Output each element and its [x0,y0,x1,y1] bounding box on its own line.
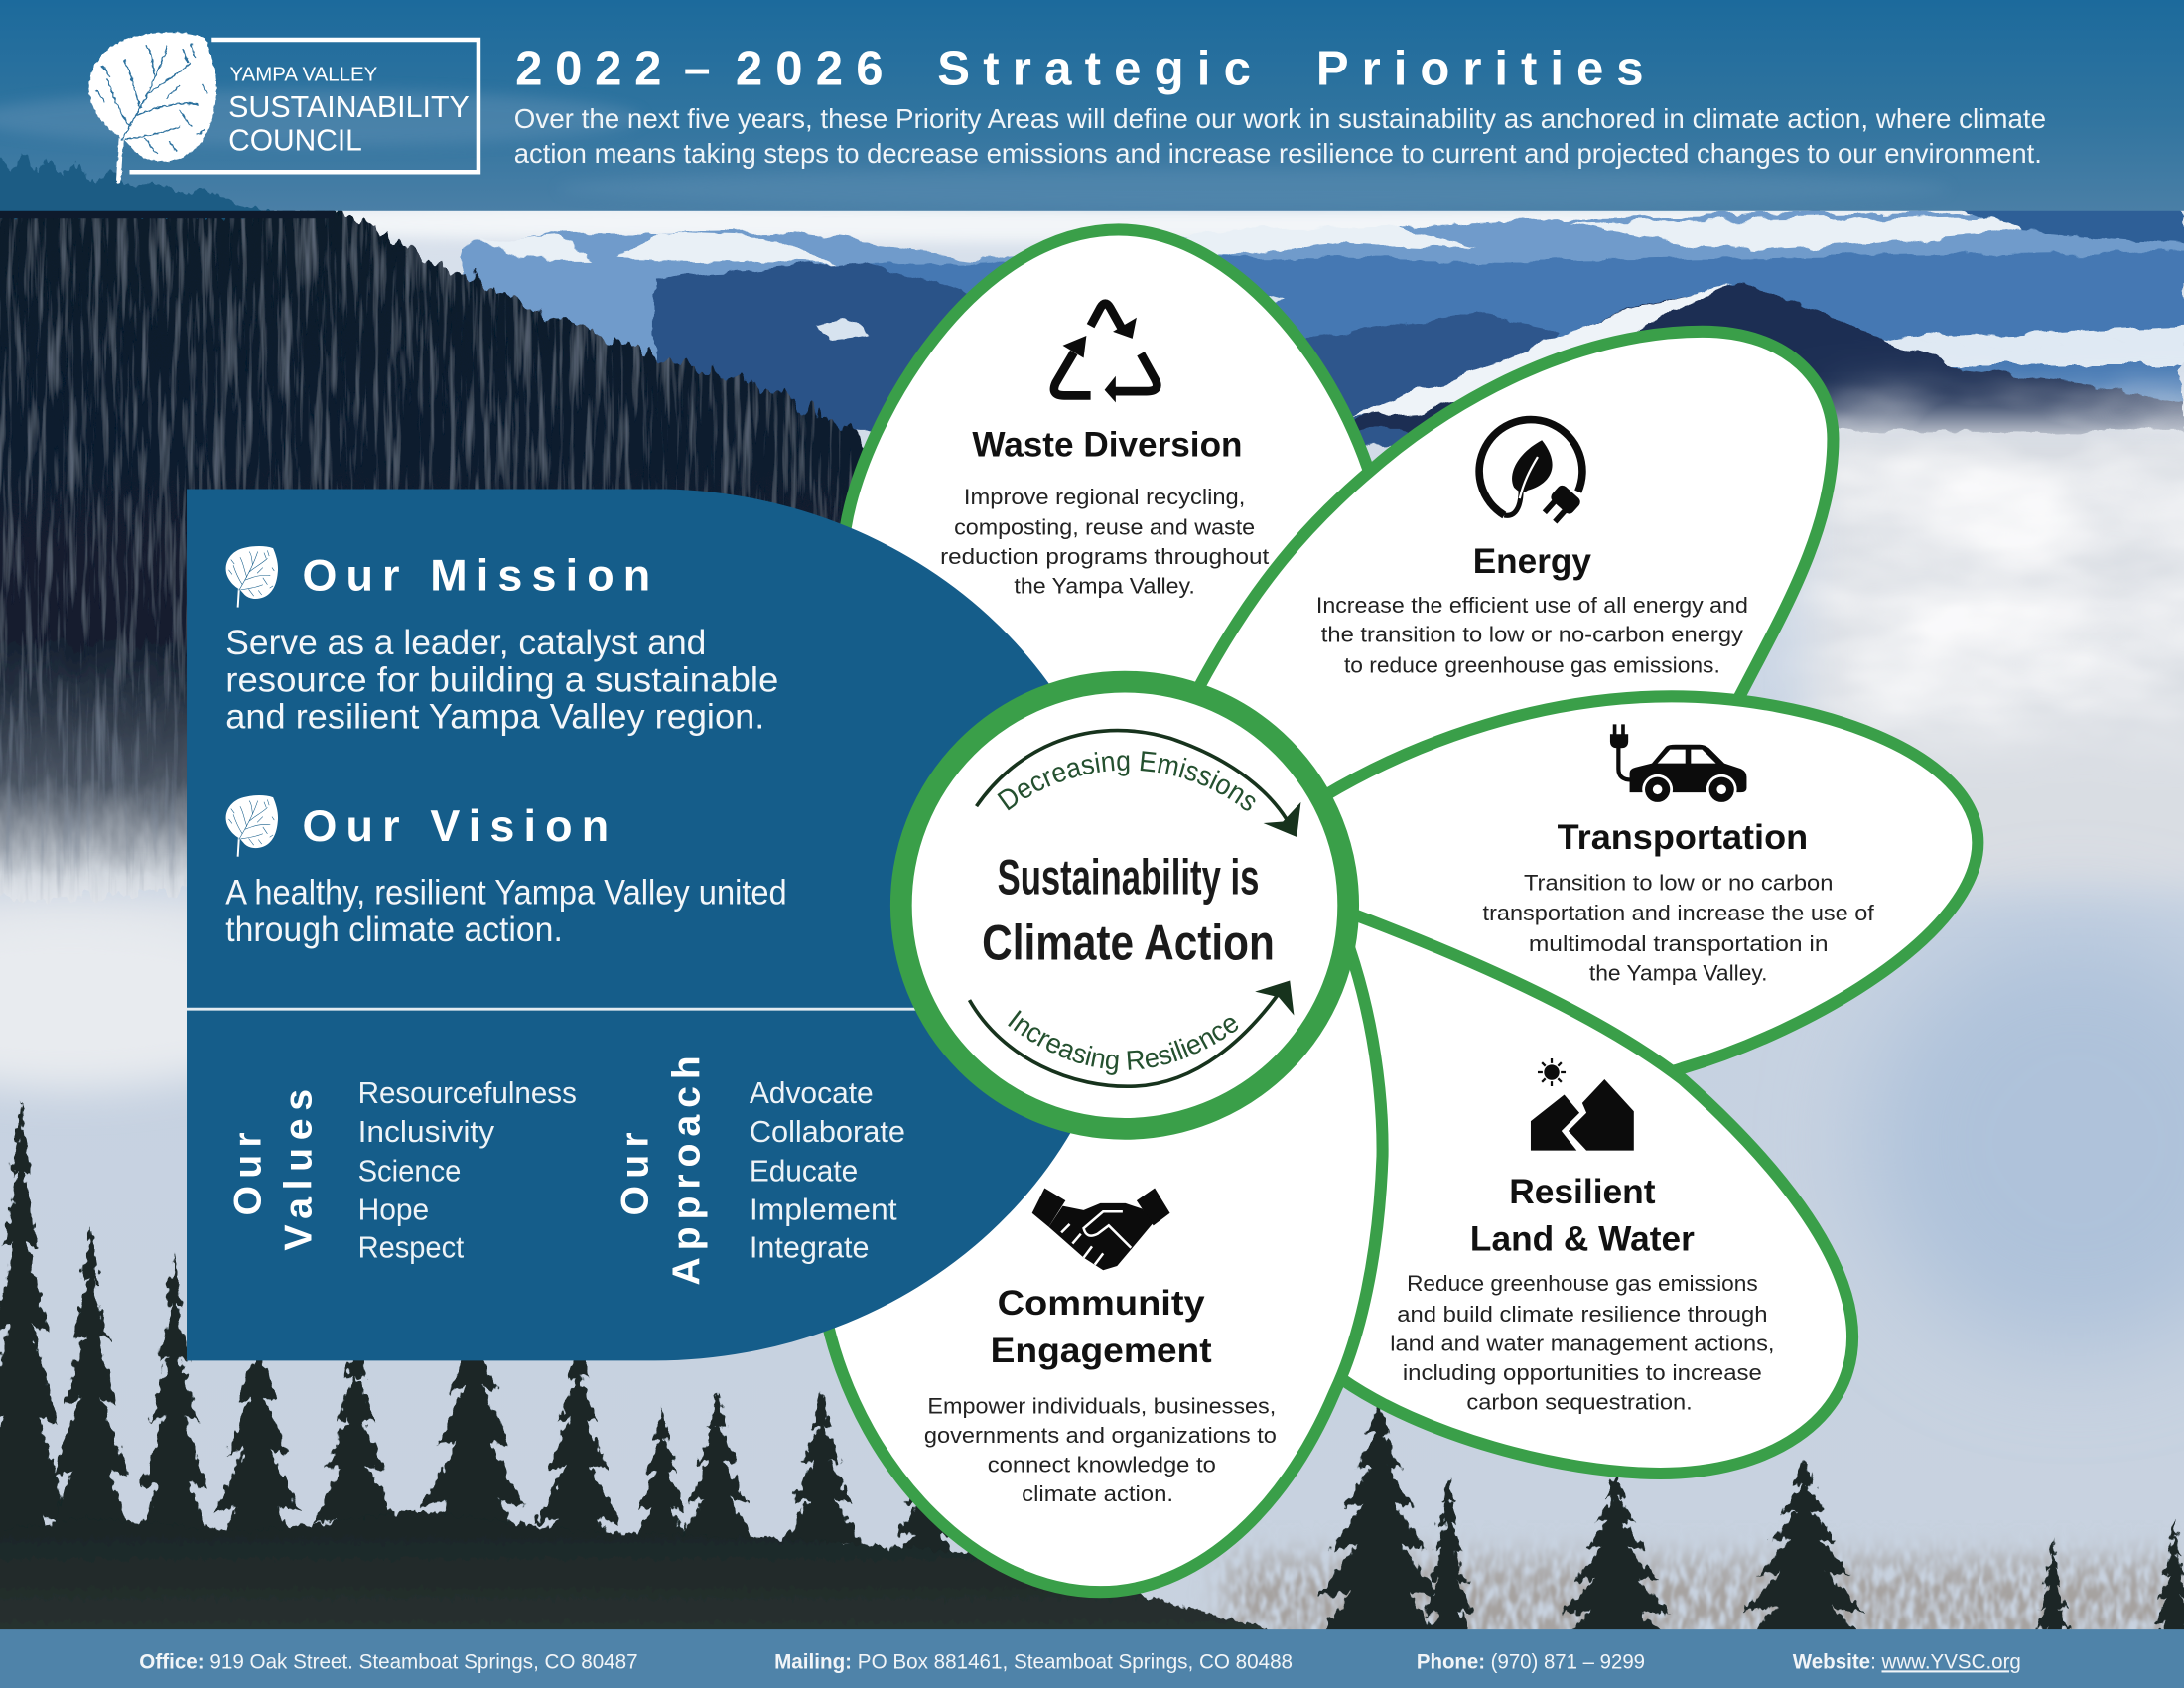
vision text: through climate action. [225,911,563,949]
description [940,485,1270,599]
mission text [225,624,778,737]
petal outline [1323,696,1978,1072]
icon: electric car [1610,724,1746,805]
panel: resilient land and water petal [1287,915,1852,1474]
center statement [982,849,1275,970]
approach list: Integrate [750,1230,870,1265]
description: reduction programs throughout [940,544,1270,569]
description: the Yampa Valley. [1589,960,1767,985]
center statement: Climate Action [982,914,1275,970]
description: to reduce greenhouse gas emissions. [1344,652,1720,677]
icon: recycle [1054,304,1157,402]
our approach heading [613,1055,708,1286]
arrow: decreasing emissions [977,731,1300,837]
our values heading: Our [225,1132,269,1216]
vision heading: Our Vision [302,800,609,851]
values list: Resourcefulness [358,1075,577,1110]
circle [901,682,1348,1129]
petal outline [827,933,1383,1592]
mission text: Serve as a leader, catalyst and [225,624,706,662]
description: Empower individuals, businesses, [927,1394,1276,1419]
our approach heading: Approach [664,1055,708,1286]
title: 2022 [515,43,661,96]
heading: Resilient [1509,1173,1656,1211]
center statement: Sustainability is [998,849,1259,905]
description: Increase the efficient use of all energy and [1316,593,1748,618]
mission text: resource for building a sustainable [225,660,778,699]
header intro text [514,103,2046,169]
heading: Community [998,1284,1205,1323]
values list: Inclusivity [358,1114,495,1149]
description: carbon sequestration. [1466,1389,1693,1414]
icon: leaf and plug [1479,420,1582,526]
petal outline [1287,915,1852,1474]
petal outline [843,229,1374,752]
our values heading [225,1089,321,1251]
panel: energy petal [1177,332,1833,808]
arrow: increasing resilience [970,980,1294,1086]
arc label: increasing resilience: Increasing Resilience [1008,1010,1239,1075]
title [515,43,1644,96]
panel: mission, vision, values, approach [187,489,1128,1360]
approach list [750,1075,905,1265]
title: – [684,43,711,96]
phone: Phone: (970) 871 – 9299 [1417,1650,1645,1673]
mission heading: Our Mission [302,550,650,601]
heading [991,1284,1212,1370]
icon: aspen leaf logo [89,33,216,183]
panel: transportation petal [1323,696,1978,1072]
footer band [0,1629,2184,1688]
description: the Yampa Valley. [1014,574,1195,599]
heading: Energy [1473,542,1591,581]
header intro text: Over the next five years, these Priority Areas will define our work in sustainability as anchored in climate action, where climate [514,103,2046,134]
description: Reduce greenhouse gas emissions [1407,1271,1758,1296]
logo wordmark: YAMPA VALLEY [230,64,378,85]
description: climate action. [1022,1481,1173,1506]
description: multimodal transportation in [1529,931,1829,956]
title: Strategic [937,43,1251,96]
office address: Office: 919 Oak Street. Steamboat Springs, CO 80487 [139,1650,638,1673]
description: transportation and increase the use of [1483,901,1875,925]
title: 2026 [736,43,884,96]
values list: Science [358,1153,461,1188]
icon: sun and mountains [1531,1058,1634,1151]
description: the transition to low or no-carbon energy [1321,623,1744,647]
panel: community engagement petal [827,933,1383,1592]
logo frame [129,40,478,172]
arc label: decreasing emissions: Decreasing Emissions [997,751,1255,810]
approach list: Advocate [750,1075,874,1110]
vision text: A healthy, resilient Yampa Valley united [225,873,787,912]
logo wordmark [228,64,470,157]
heading: Waste Diversion [972,425,1243,464]
description [1483,870,1875,985]
description: Transition to low or no carbon [1524,870,1833,895]
heading [1470,1173,1695,1259]
logo [89,33,478,183]
heading: Engagement [991,1332,1212,1370]
mailing address: Mailing: PO Box 881461, Steamboat Springs, CO 80488 [774,1650,1293,1673]
description: and build climate resilience through [1397,1302,1767,1327]
mission text: and resilient Yampa Valley region. [225,698,764,737]
description: governments and organizations to [924,1423,1277,1448]
icon: mission leaf [226,546,278,608]
panel: waste diversion petal [843,229,1374,752]
header intro text: action means taking steps to decrease emissions and increase resilience to current and projected changes to our environment. [514,138,2042,169]
description [924,1394,1277,1506]
values list: Hope [358,1193,429,1227]
petal outline [1177,332,1833,808]
description: connect knowledge to [988,1453,1216,1477]
values list [358,1075,577,1265]
icon: handshake [1032,1188,1170,1270]
vision text [225,873,787,949]
description: including opportunities to increase [1403,1360,1762,1385]
description [1316,593,1748,677]
title: Priorities [1316,43,1644,96]
approach list: Implement [750,1193,897,1227]
description: Improve regional recycling, [964,485,1245,509]
description: composting, reuse and waste [954,515,1255,540]
values list: Respect [358,1230,465,1265]
heading: Land & Water [1470,1220,1695,1259]
divider line [187,1008,922,1010]
logo wordmark: COUNCIL [228,124,362,157]
description: land and water management actions, [1390,1332,1774,1356]
approach list: Educate [750,1153,858,1188]
panel background [187,489,1128,1360]
logo wordmark: SUSTAINABILITY [228,91,470,124]
website: Website: www.YVSC.org [1793,1650,2021,1673]
our approach heading: Our [613,1132,656,1216]
approach list: Collaborate [750,1114,905,1149]
center circle: sustainability is climate action [889,671,1360,1140]
heading: Transportation [1558,818,1808,857]
header band [0,0,2184,218]
icon: vision leaf [226,795,278,857]
our values heading: Values [277,1089,321,1251]
description [1390,1271,1774,1414]
